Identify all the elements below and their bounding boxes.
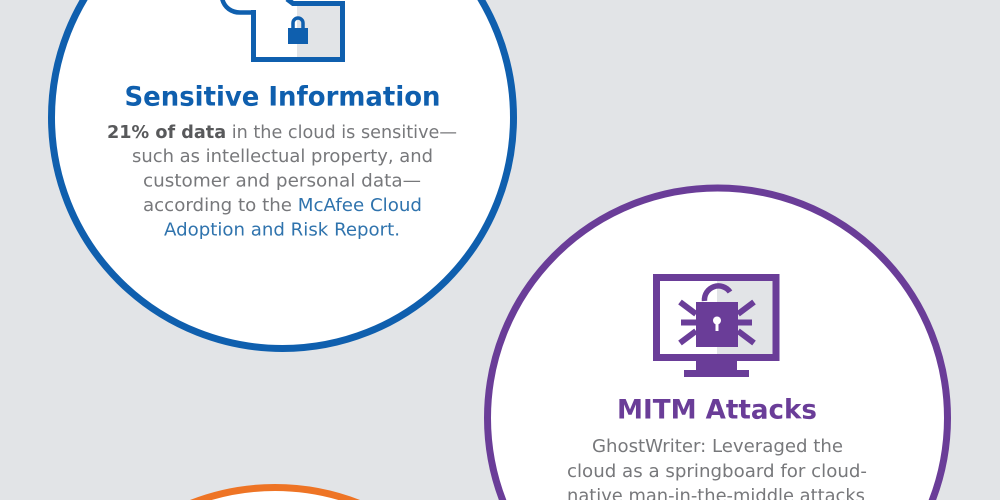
icon: monitor with unlocked padlock	[656, 278, 776, 377]
heading: Sensitive Information	[124, 82, 440, 112]
body text: customer and personal data—	[143, 172, 421, 192]
body text: according to the McAfee Cloud	[143, 196, 422, 216]
body text: cloud as a springboard for cloud-	[567, 462, 867, 482]
heading: MITM Attacks	[617, 394, 817, 426]
icon: cloud folder with lock	[222, 0, 342, 60]
purple circle	[488, 188, 948, 500]
panel: orange circle	[44, 488, 506, 500]
panel: MITM attacks	[488, 188, 948, 500]
body text: Adoption and Risk Report.	[164, 220, 400, 240]
body text: GhostWriter: Leveraged the	[592, 437, 843, 457]
body text	[567, 437, 867, 500]
panel: sensitive information	[52, 0, 514, 348]
body text	[107, 123, 457, 240]
body text: such as intellectual property, and	[132, 147, 433, 167]
blue circle	[52, 0, 514, 348]
body text: 21% of data in the cloud is sensitive—	[107, 123, 457, 143]
